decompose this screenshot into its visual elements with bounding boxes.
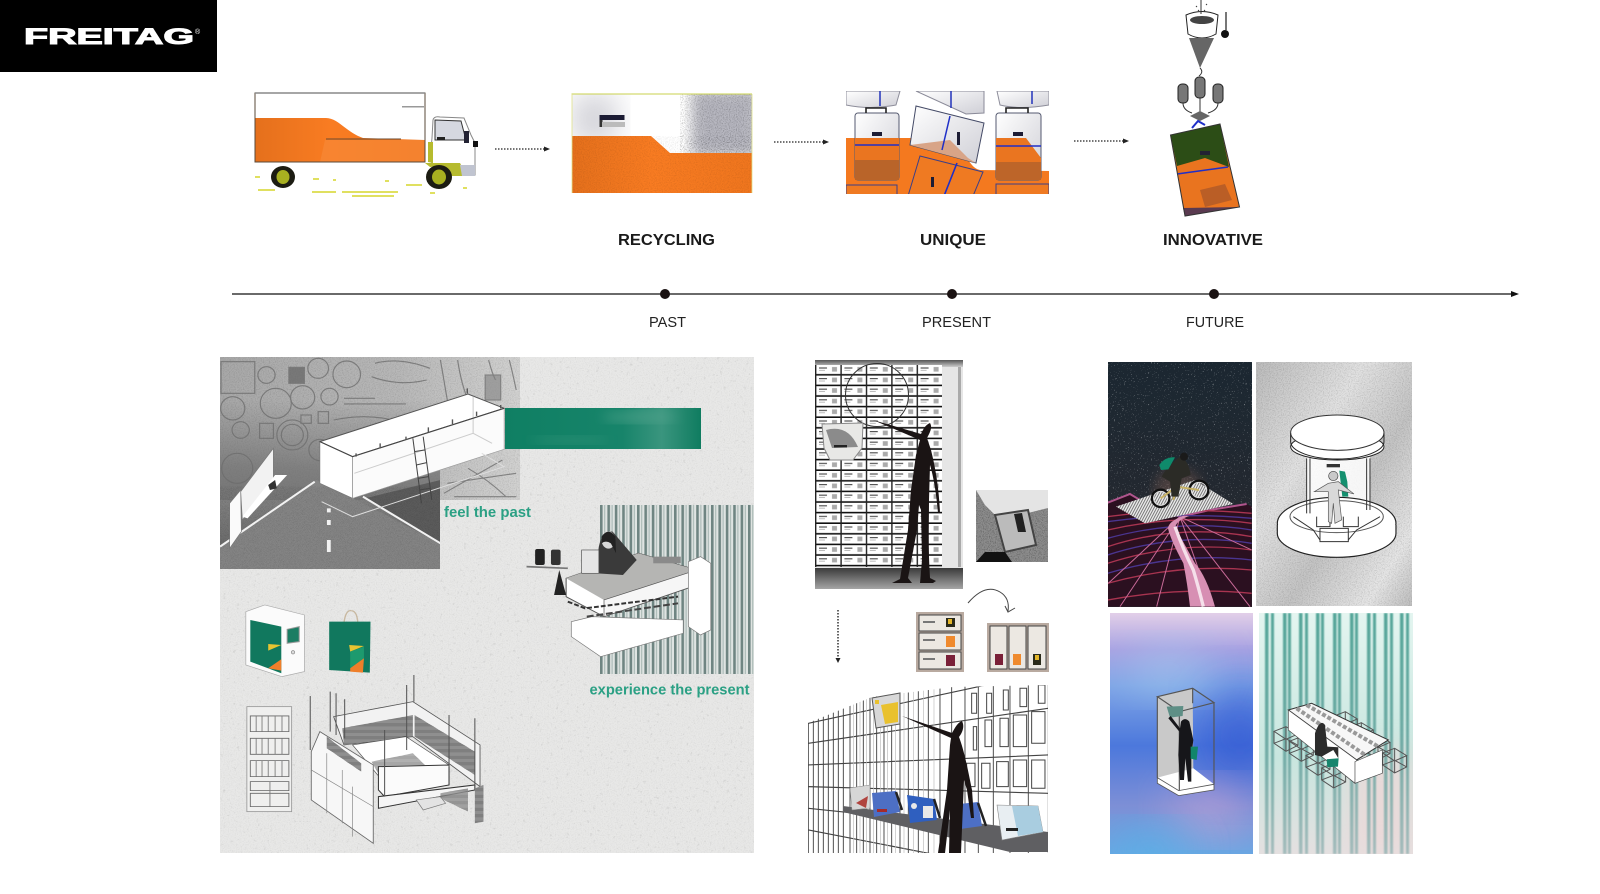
icon: magnifier circle — [846, 364, 908, 426]
image: road photograph — [220, 400, 440, 569]
label: INNOVATIVE: INNOVATIVE — [1163, 232, 1263, 249]
marker: past — [660, 289, 670, 299]
marker: future — [1209, 289, 1219, 299]
label: RECYCLING: RECYCLING — [618, 232, 715, 249]
arrow: dotted down — [836, 610, 840, 663]
image: postage stamps background — [220, 357, 520, 500]
image: cyclist on synthwave terrain — [1108, 362, 1252, 607]
illustration: kiosk with green tarp — [246, 605, 304, 677]
arrow: unique to innovative — [1074, 138, 1129, 144]
illustration: shop structure axonometric — [310, 675, 483, 843]
illustration: perspective shop wall — [808, 685, 1048, 853]
label: PRESENT: PRESENT — [922, 315, 991, 331]
panel: unique bags pattern — [846, 91, 1049, 196]
timeline axis — [232, 289, 1519, 299]
image: green textile strip — [505, 408, 701, 449]
icon: innovative spinning machine and bag — [1170, 0, 1240, 216]
label: FUTURE: FUTURE — [1186, 315, 1244, 331]
icon: pulled out drawer — [872, 693, 900, 728]
illustration: sewing desk with person — [527, 531, 711, 657]
icon: hopper funnel — [1186, 0, 1229, 76]
image: drawer box vertical — [987, 623, 1049, 672]
silhouette: figure reaching for drawer — [873, 420, 940, 583]
arrow: recycling to unique — [774, 140, 829, 144]
illustration: storage shelf — [247, 707, 292, 812]
label: UNIQUE: UNIQUE — [920, 232, 986, 249]
icon: bags on shelf — [850, 785, 1043, 840]
icon: orange truck — [255, 93, 478, 196]
logo: FREITAG — [0, 0, 217, 72]
arrow: curved between boxes — [968, 589, 1015, 612]
marker: present — [947, 289, 957, 299]
logo: FREITAG: ® — [195, 28, 201, 36]
illustration: shopping bag — [329, 611, 371, 673]
silhouette: figure reaching at shop wall — [902, 716, 974, 853]
image: drawer box horizontal — [916, 612, 964, 672]
arrow: truck to recycling — [495, 146, 550, 152]
image: person in glass booth on gradient — [1110, 613, 1253, 854]
caption: experience the present: experience the present — [590, 682, 750, 698]
panel: past collage — [220, 357, 754, 853]
image: person at modular table over stripes — [1259, 613, 1413, 854]
panel: recycling tarpaulin — [572, 90, 758, 193]
panel: future collage — [1105, 362, 1413, 870]
label: PAST: PAST — [649, 315, 686, 331]
panel: present collage — [808, 360, 1049, 877]
icon: thread spools — [1178, 77, 1223, 121]
illustration: ladder — [413, 437, 432, 503]
caption: feel the past: feel the past — [444, 504, 531, 521]
logo: FREITAG: FREITAG — [24, 24, 194, 49]
icon: selected messenger bag — [822, 423, 863, 460]
icon: woven green and orange bag — [1170, 121, 1240, 216]
image: striped curtain — [600, 505, 754, 674]
image: open drawer photo — [976, 490, 1048, 562]
illustration: billboard with bench — [230, 448, 287, 548]
illustration: floating container box — [320, 388, 504, 517]
image: wall of drawers with silhouette — [815, 360, 963, 589]
image: astronaut under silver capsule — [1256, 362, 1412, 606]
